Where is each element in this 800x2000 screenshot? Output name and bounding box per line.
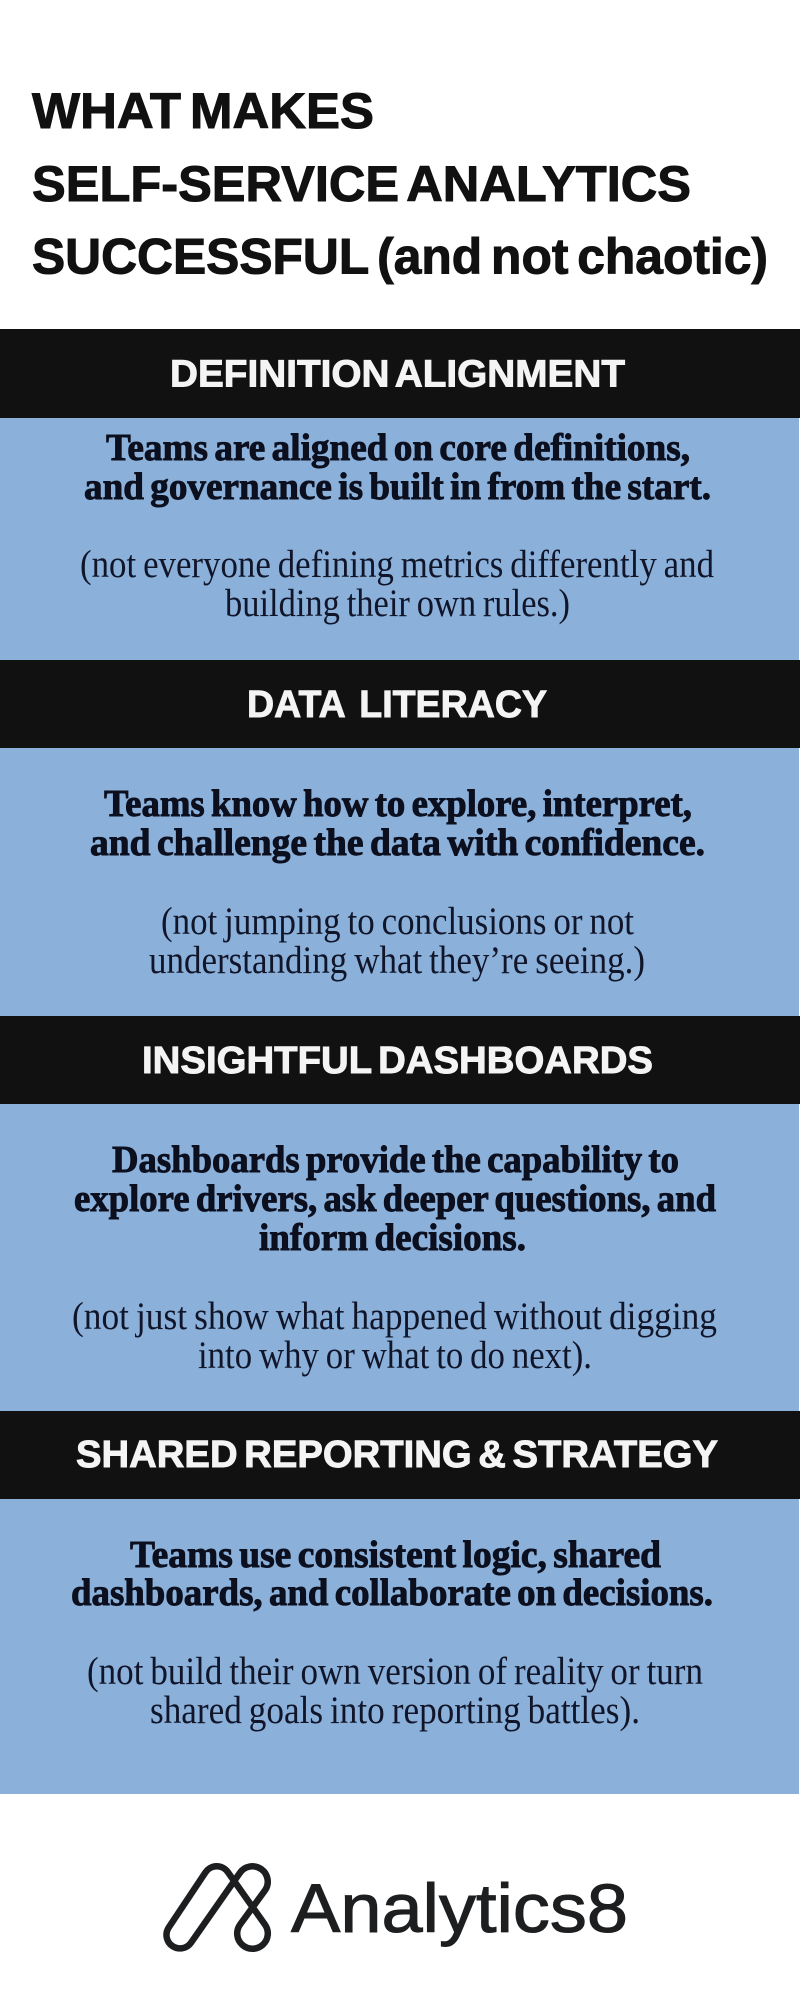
header: definition alignment: [0, 329, 800, 418]
header: insightful dashboards: INSIGHTFUL DASHBOARDS: [142, 1040, 653, 1082]
header: data literacy: DATA LITERACY: [247, 684, 547, 726]
title: WHAT MAKES: [32, 83, 374, 139]
body panel: shared reporting and strategy: [0, 1499, 799, 1794]
body panel: data literacy: understanding what they’re seeing.): [149, 939, 645, 982]
body panel: insightful dashboards: inform decisions.: [259, 1217, 526, 1259]
panel: insightful dashboards: [0, 1016, 800, 1411]
title: SELF-SERVICE ANALYTICS: [32, 156, 691, 212]
panel: definition alignment: [0, 329, 800, 660]
title: SUCCESSFUL (and not chaotic): [32, 228, 768, 284]
title: [32, 83, 768, 284]
icon: Analytics8 mark: [166, 1866, 268, 1949]
body panel: shared reporting and strategy: shared goals into reporting battles).: [150, 1689, 640, 1732]
header: definition alignment: DEFINITION ALIGNMENT: [170, 354, 625, 396]
body panel: definition alignment: [0, 418, 799, 660]
body panel: data literacy: and challenge the data with confidence.: [90, 822, 705, 864]
header: data literacy: [0, 660, 800, 748]
body panel: insightful dashboards: [0, 1104, 799, 1411]
header: shared reporting and strategy: SHARED REPORTING & STRATEGY: [76, 1434, 718, 1476]
body panel: data literacy: Teams know how to explore, interpret,: [104, 783, 692, 825]
panel: shared reporting and strategy: [0, 1411, 800, 1794]
body panel: definition alignment: and governance is built in from the start.: [84, 466, 711, 508]
logo: Analytics8: [166, 1866, 628, 1949]
body panel: definition alignment: (not everyone defining metrics differently and: [80, 543, 714, 586]
body panel: insightful dashboards: (not just show what happened without digging: [72, 1295, 717, 1338]
body panel: insightful dashboards: into why or what to do next).: [198, 1334, 592, 1377]
body panel: data literacy: (not jumping to conclusions or not: [161, 900, 634, 943]
header: insightful dashboards: [0, 1016, 800, 1104]
body panel: shared reporting and strategy: Teams use consistent logic, shared: [130, 1534, 661, 1576]
body panel: definition alignment: Teams are aligned on core definitions,: [106, 427, 690, 469]
wordmark: Analytics8: [291, 1870, 628, 1947]
body panel: data literacy: [0, 748, 799, 1016]
panel: data literacy: [0, 660, 800, 1016]
body panel: insightful dashboards: explore drivers, ask deeper questions, and: [74, 1178, 716, 1220]
header: shared reporting and strategy: [0, 1411, 800, 1499]
body panel: definition alignment: building their own rules.): [225, 582, 570, 625]
body panel: shared reporting and strategy: (not build their own version of reality or turn: [87, 1650, 703, 1693]
body panel: insightful dashboards: Dashboards provide the capability to: [112, 1139, 679, 1181]
body panel: shared reporting and strategy: dashboards, and collaborate on decisions.: [71, 1572, 713, 1614]
